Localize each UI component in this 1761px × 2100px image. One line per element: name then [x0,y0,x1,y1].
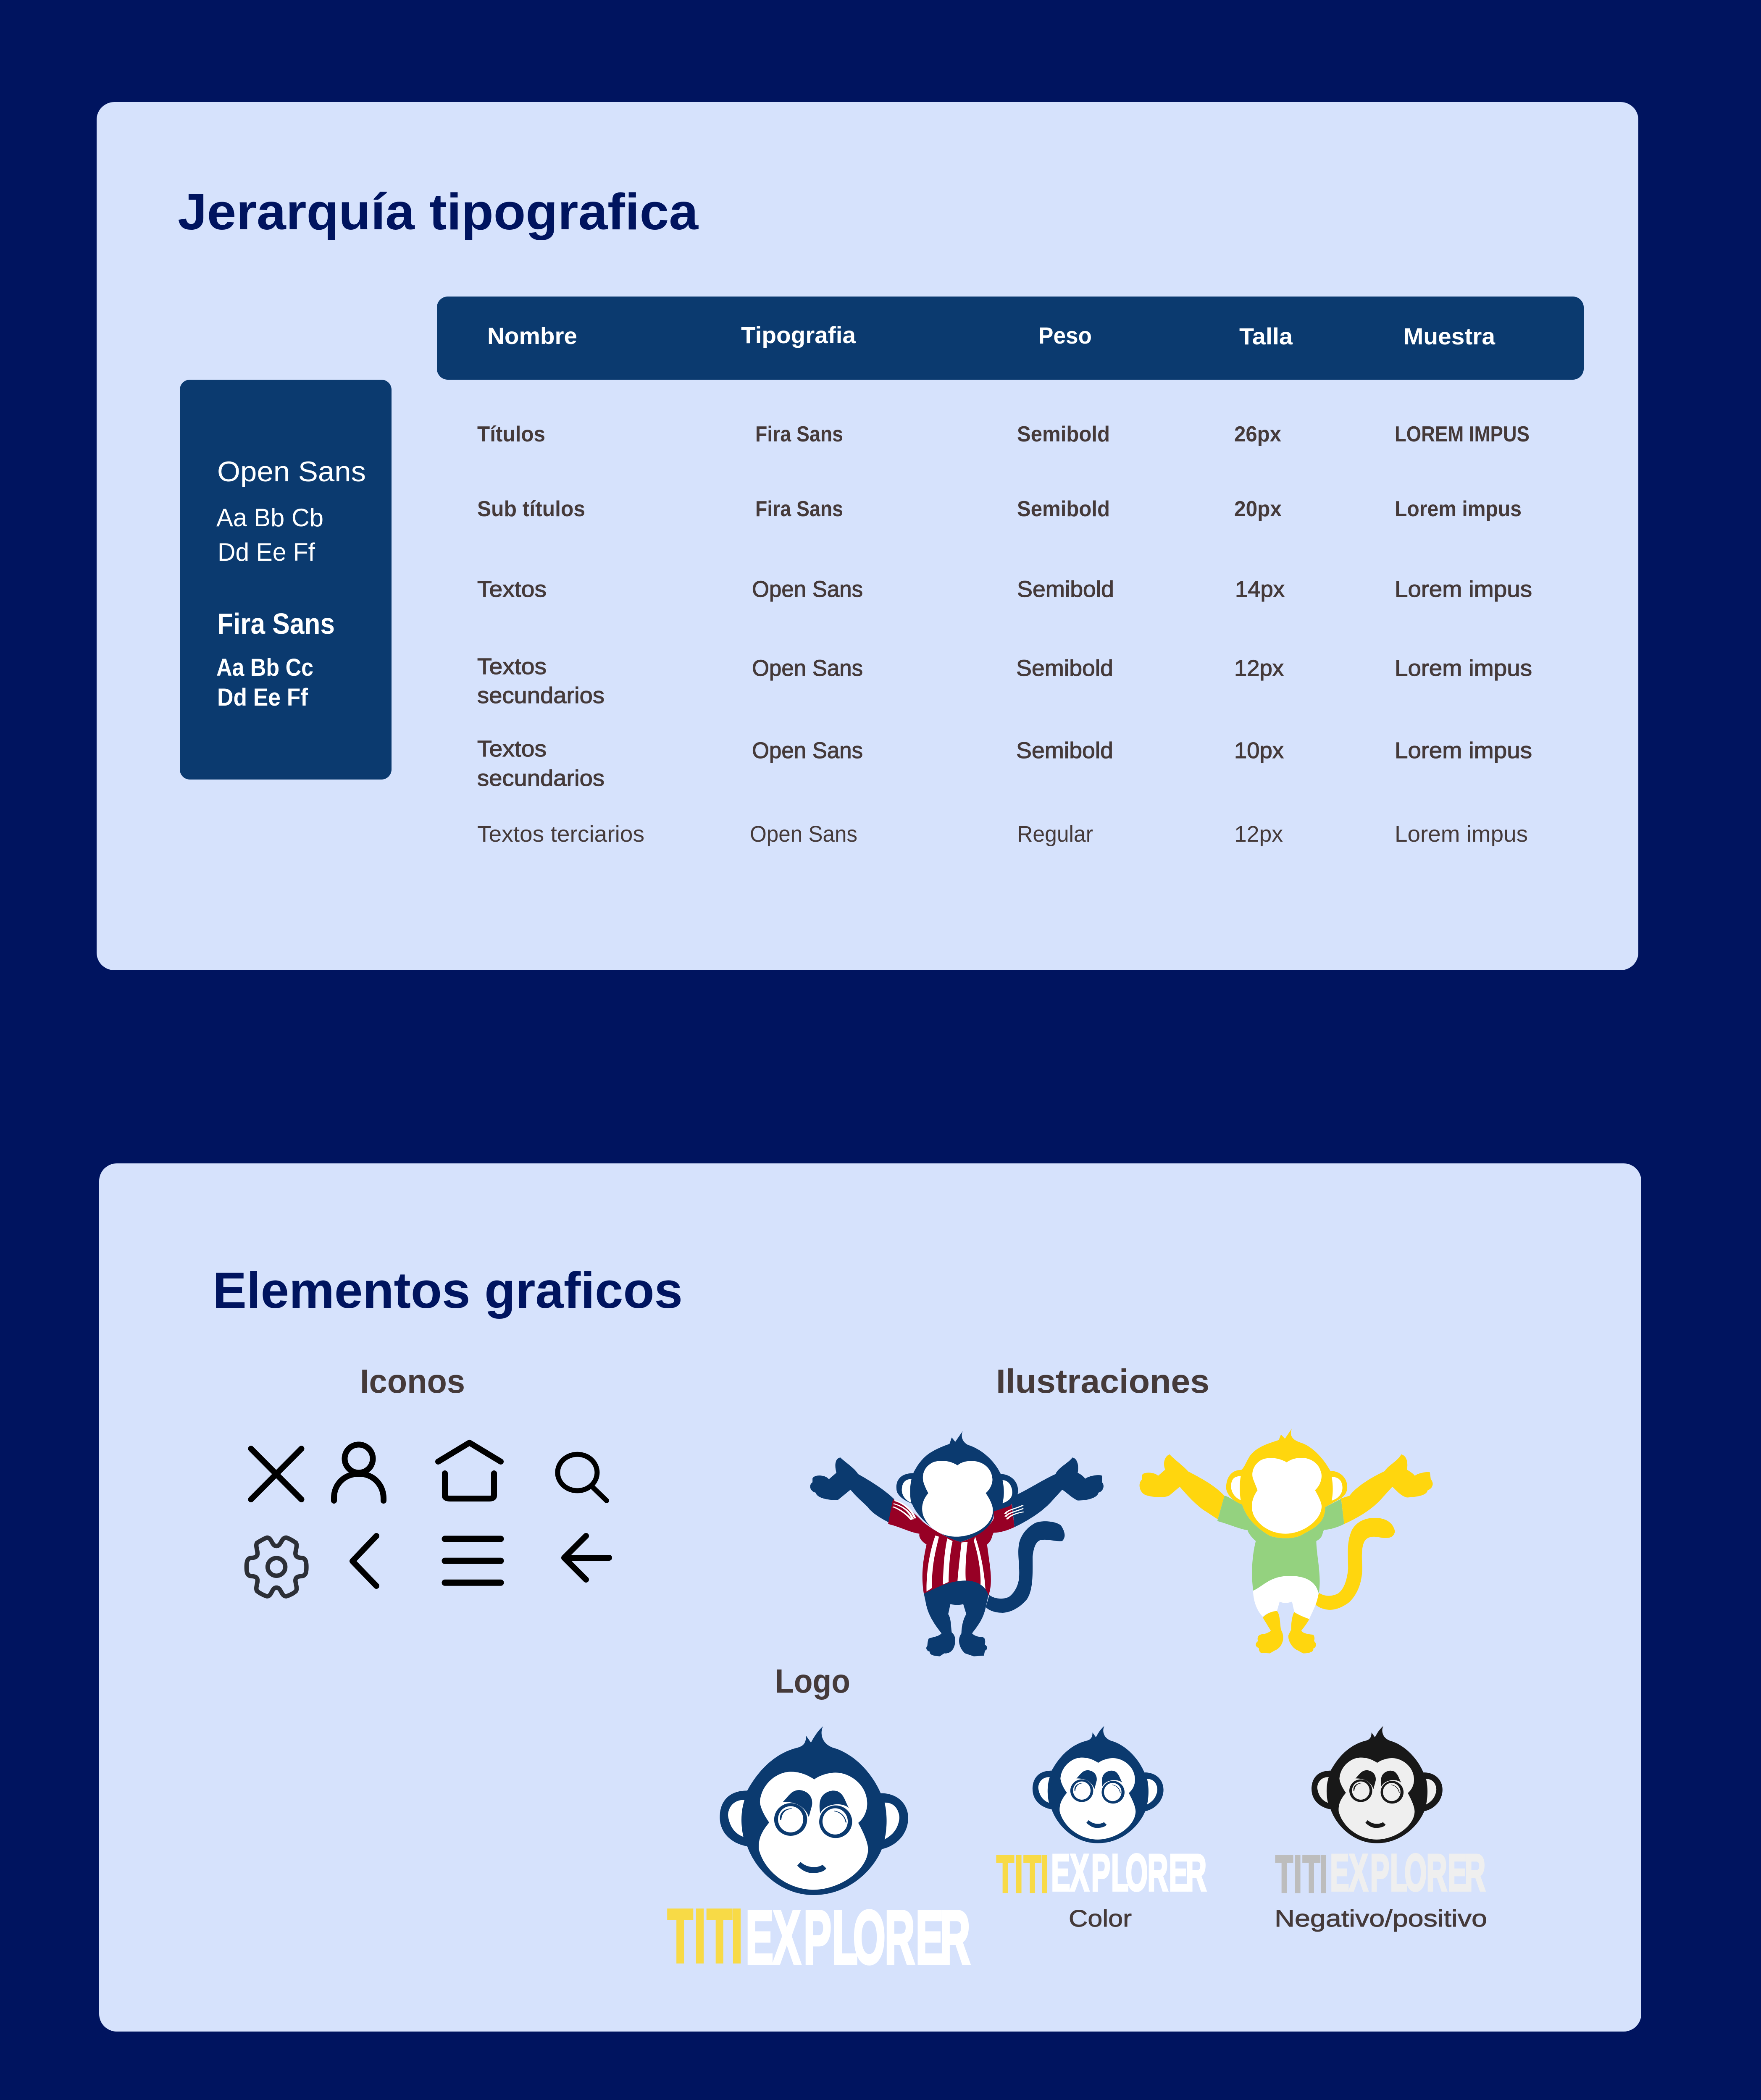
logo wordmark: large: EXPLORER [746,1895,970,1979]
face [1252,1458,1322,1534]
icon: search [557,1454,607,1501]
table row: Títulos: Semibold [1017,422,1110,446]
font name: Fira Sans: Fira Sans [217,607,335,640]
icon: user [334,1445,384,1501]
heading: Iconos: Iconos [360,1362,465,1400]
icon: arrow back [564,1536,609,1580]
left arm [1140,1454,1225,1519]
right leg [1288,1612,1316,1654]
table row: Textos [477,577,1532,602]
table row: Textos terciarios: Textos terciarios [477,822,644,847]
table row: Títulos [477,422,1530,446]
table row: Sub títulos: Sub títulos [477,497,585,521]
heading: Logo: Logo [775,1662,850,1700]
Fira Sans sample line 1: Aa Bb Cc [216,654,313,681]
column: Talla: Talla [1239,323,1293,349]
table row: Textos secundarios 10px: secundarios [477,766,605,791]
table row: Títulos: Fira Sans [755,422,843,446]
table row: Textos terciarios: Regular [1017,822,1093,847]
table row: Textos secundarios 12px: Open Sans [752,656,863,681]
table row: Textos terciarios: Open Sans [750,822,857,847]
logo wordmark: large: TITI [668,1893,743,1978]
table row: Sub títulos: Fira Sans [755,497,843,521]
ears [902,1479,1012,1503]
Open Sans sample line 2: Dd Ee Ff [218,538,315,566]
column: Tipografia: Tipografia [741,322,856,348]
right arm [1341,1454,1433,1524]
table row: Textos secundarios 10px: Semibold [1016,738,1113,763]
logo wordmark: negative: TITI [1275,1845,1327,1903]
table row: Textos: Semibold [1017,577,1114,602]
table row: Sub títulos: 20px [1234,497,1282,521]
title: Jerarquía tipografica: Jerarquía tipografica [178,183,699,240]
logo wordmark: color: TITI [996,1845,1049,1903]
column: Muestra: Muestra [1404,323,1496,349]
table row: Textos secundarios 10px: 10px [1234,738,1284,763]
illustration: yellow monkey in green shirt [1140,1428,1433,1654]
face [922,1461,993,1537]
illustration: blue monkey in striped jersey [810,1431,1104,1656]
table row: Textos terciarios: 12px [1234,822,1283,847]
table row: Textos secundarios 10px: Lorem impus [1395,738,1532,763]
panel: elementos graficos [99,1163,1641,2032]
icon: settings gear [247,1538,306,1596]
green shirt [1217,1496,1344,1592]
icon: menu [445,1539,501,1583]
table row: Textos: 14px [1235,577,1285,602]
font samples card [180,380,392,780]
sleeve stripes [893,1501,1024,1520]
table header bar [437,297,1584,380]
tail [986,1521,1064,1613]
column: Peso: Peso [1038,322,1092,349]
caption: Color: Color [1069,1905,1132,1932]
table row: Textos secundarios 12px: Semibold [1016,656,1113,681]
logo: main large head [720,1726,908,1895]
legs and shorts [924,1580,988,1656]
icon set [247,1443,609,1596]
tail [1315,1518,1395,1610]
heading: Ilustraciones: Ilustraciones [996,1362,1209,1400]
head [896,1431,1018,1542]
panel: jerarquía tipografica [97,102,1638,970]
red jersey [888,1499,1015,1596]
table row: Sub títulos [477,497,1522,521]
table row: Textos: Open Sans [752,577,863,602]
Open Sans sample line 1: Aa Bb Cb [216,504,323,532]
font name: Open Sans: Open Sans [217,456,366,488]
logo wordmark: negative: EXPLORER [1330,1844,1485,1902]
title: Elementos graficos: Elementos graficos [213,1262,683,1319]
table row: Textos secundarios 12px: 12px [1234,656,1284,681]
table row: Títulos: LOREM IMPUS [1395,422,1530,446]
table row: Textos: Lorem impus [1395,577,1532,602]
logo: color head [1033,1726,1164,1843]
table row: Textos secundarios 12px: secundarios [477,683,605,708]
table row: Textos secundarios 12px: Textos [477,654,547,679]
table row: Títulos: 26px [1234,422,1281,446]
table row: Textos terciarios [477,822,1528,847]
jersey stripes [926,1536,986,1595]
ears [1231,1476,1343,1501]
table row: Textos: Textos [477,577,547,602]
caption: Negativo/positivo: Negativo/positivo [1275,1905,1487,1932]
head [1226,1428,1347,1538]
logo wordmark: color: EXPLORER [1051,1844,1206,1902]
table row: Textos secundarios 10px: Open Sans [752,738,863,763]
column: Nombre: Nombre [487,323,577,349]
table row: Sub títulos: Semibold [1017,497,1110,521]
logo: negative head [1312,1726,1443,1843]
table row: Textos secundarios 12px [477,654,1532,708]
Fira Sans sample line 2: Dd Ee Ff [217,684,308,711]
left leg [1256,1611,1283,1654]
table row: Textos secundarios 10px: Textos [477,736,547,761]
table row: Textos terciarios: Lorem impus [1395,822,1528,847]
left arm [810,1457,894,1522]
white shorts [1253,1576,1319,1619]
icon: home [438,1443,501,1499]
table row: Textos secundarios 10px [477,736,1532,791]
icon: chevron left [352,1536,376,1586]
table row: Textos secundarios 12px: Lorem impus [1395,656,1532,681]
table row: Sub títulos: Lorem impus [1395,497,1522,521]
right arm [1012,1457,1104,1527]
table row: Títulos: Títulos [477,422,545,446]
icon: close [251,1449,302,1499]
